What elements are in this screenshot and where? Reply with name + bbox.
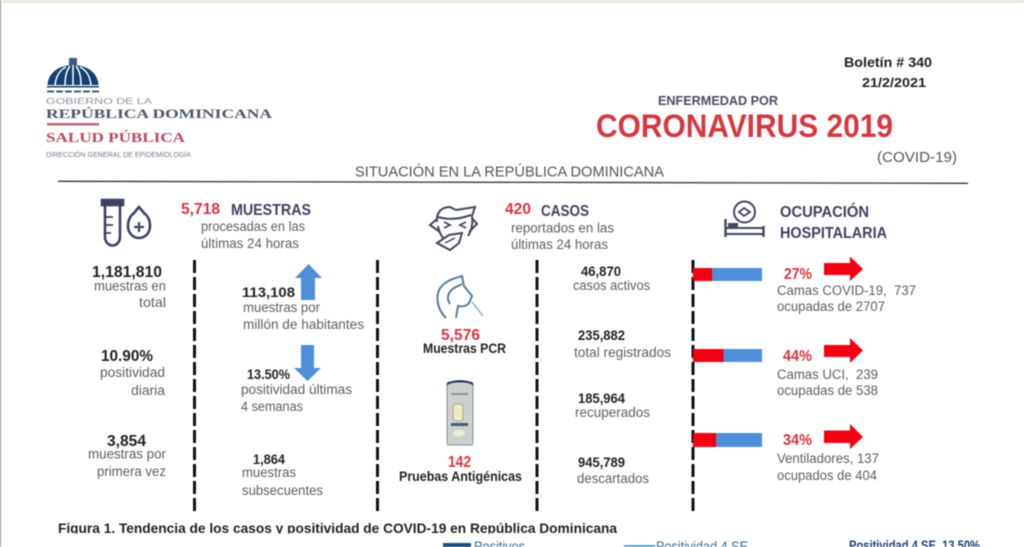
heading: casos: últimas 24 horas	[511, 237, 608, 252]
column: muestras totals: primera vez	[97, 464, 166, 479]
title: ENFERMEDAD POR	[658, 93, 779, 108]
column: muestras totals: positividad	[100, 365, 165, 380]
title	[596, 93, 957, 166]
logo: Gobierno de la República Dominicana, Salud Pública: DIRECCIÓN GENERAL DE EPIDEMIOLOGÍA	[46, 150, 191, 159]
subtitle: SITUACIÓN EN LA REPÚBLICA DOMINICANA	[355, 164, 664, 180]
icon: antigen test device	[447, 380, 473, 445]
heading: muestras	[181, 201, 311, 251]
column: muestras detail: muestras	[242, 465, 296, 480]
column: muestras detail: 4 semanas	[241, 399, 303, 414]
column: muestras detail: millón de habitantes	[243, 317, 364, 332]
stat: pruebas antigénicas: Pruebas Antigénicas	[399, 469, 522, 484]
heading: muestras: últimas 24 horas	[201, 236, 299, 251]
column: casos detail: 46,870	[581, 264, 621, 279]
bulletin number and date	[844, 54, 932, 90]
column: casos detail: 185,964	[578, 391, 625, 406]
heading: ocupación hospitalaria	[780, 203, 887, 242]
arrow: up	[295, 264, 322, 300]
column: muestras detail: muestras por	[243, 300, 320, 315]
occupancy: ventiladores: ocupados de 404	[777, 468, 877, 483]
occupancy: ventiladores: 34%	[783, 432, 812, 449]
bulletin number and date: Boletín # 340	[844, 54, 932, 70]
occupancy: camas UCI: Camas UCI, 239	[777, 367, 878, 382]
column: casos detail: casos activos	[573, 278, 650, 293]
column: casos detail: 945,789	[578, 455, 625, 470]
column: casos detail: descartados	[577, 471, 649, 486]
icon: test tube and blood drop	[102, 200, 150, 245]
icon: head with nasal swab	[437, 276, 483, 318]
column: muestras totals: muestras en	[94, 278, 166, 294]
heading: muestras: MUESTRAS	[231, 202, 311, 219]
column: muestras detail: positividad últimas	[241, 382, 352, 397]
column: casos detail	[573, 264, 671, 486]
occupancy: camas COVID-19: ocupadas de 2707	[777, 299, 885, 314]
occupancy: camas UCI: 44%	[783, 348, 812, 365]
occupancy: camas COVID-19: 27%	[784, 266, 812, 283]
occupancy: camas COVID-19: Camas COVID-19, 737	[777, 283, 916, 298]
column: muestras totals: 1,181,810	[92, 264, 162, 281]
icon: dome	[47, 58, 99, 92]
logo: Gobierno de la República Dominicana, Salud Pública: REPÚBLICA DOMINICANA	[46, 106, 273, 121]
heading: muestras: 5,718	[181, 201, 220, 218]
heading: ocupación hospitalaria: OCUPACIÓN	[780, 203, 869, 221]
heading: casos: CASOS	[541, 203, 589, 220]
logo: Gobierno de la República Dominicana, Salud Pública: GOBIERNO DE LA	[46, 97, 153, 106]
stat: pruebas antigénicas: 142	[448, 454, 471, 471]
column: muestras detail: 13.50%	[247, 367, 290, 382]
stat: pruebas antigénicas	[399, 454, 522, 484]
heading: casos: reportados en las	[511, 220, 614, 236]
column: muestras totals: 3,854	[107, 433, 146, 450]
stat: muestras PCR: Muestras PCR	[423, 341, 506, 356]
column: casos detail: 235,882	[578, 328, 625, 343]
title: (COVID-19)	[877, 149, 957, 166]
column: muestras totals: muestras por	[88, 446, 166, 462]
heading: casos: 420	[505, 201, 531, 218]
title: CORONAVIRUS 2019	[596, 108, 893, 144]
column: muestras detail	[241, 285, 364, 498]
column: muestras totals: total	[139, 295, 166, 310]
column: muestras totals: 10.90%	[101, 348, 153, 365]
bulletin number and date: 21/2/2021	[862, 75, 926, 90]
logo: Gobierno de la República Dominicana, Salud Pública	[46, 58, 273, 159]
heading: ocupación hospitalaria: HOSPITALARIA	[780, 225, 887, 242]
dashed column dividers	[194, 260, 693, 514]
logo: Gobierno de la República Dominicana, Salud Pública: SALUD PÚBLICA	[46, 130, 185, 145]
occupancy: ventiladores	[693, 424, 879, 483]
column: casos detail: recuperados	[575, 405, 650, 420]
icon: face with mask	[430, 207, 477, 250]
column: muestras detail: subsecuentes	[242, 483, 323, 498]
column: muestras totals: diaria	[131, 383, 165, 398]
stat: muestras PCR	[423, 327, 506, 356]
occupancy: camas UCI: ocupadas de 538	[777, 383, 878, 398]
occupancy: camas COVID-19	[693, 256, 916, 314]
column: muestras detail: 113,108	[242, 285, 296, 300]
column: muestras totals	[88, 264, 166, 479]
stat: muestras PCR: 5,576	[441, 327, 480, 344]
chart legend	[443, 538, 980, 547]
arrow: down	[294, 345, 321, 381]
occupancy: camas UCI	[693, 338, 878, 398]
figure caption: Figura 1. Tendencia de los casos y positividad de COVID-19 en República Dominicana	[58, 520, 617, 536]
column: casos detail: total registrados	[574, 345, 671, 360]
icon: hospital bed	[726, 202, 764, 237]
column: muestras detail: 1,864	[253, 452, 285, 467]
heading: muestras: procesadas en las	[201, 219, 305, 234]
occupancy: ventiladores: Ventiladores, 137	[777, 451, 879, 466]
heading: casos	[505, 201, 614, 252]
